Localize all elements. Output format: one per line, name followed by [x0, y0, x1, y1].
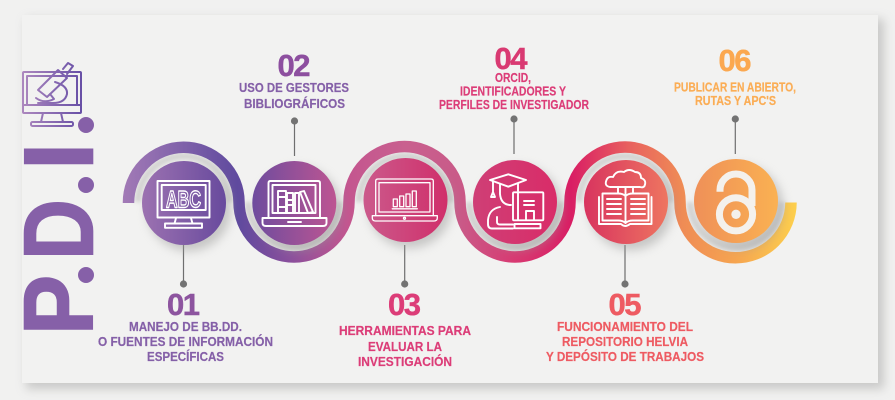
label 04: ORCID, — [495, 70, 531, 85]
label 03: EVALUAR LA — [368, 339, 442, 354]
label 06: RUTAS Y APC'S — [695, 93, 776, 108]
label 06: PUBLICAR EN ABIERTO, — [674, 80, 796, 94]
label 05: FUNCIONAMIENTO DEL — [557, 319, 693, 334]
step 6: open access circle — [694, 159, 783, 249]
label 04: IDENTIFICADORES Y — [460, 84, 566, 98]
label 03 — [339, 287, 471, 369]
icon: open book with cloud — [599, 170, 652, 226]
label 01: MANEJO DE BB.DD. — [129, 319, 242, 334]
icon: laptop with books — [262, 181, 326, 226]
label 05: REPOSITORIO HELVIA — [562, 334, 688, 349]
step 3: laptop with chart circle — [364, 158, 452, 248]
label 01: 01 — [167, 287, 200, 322]
icon: ABC monitor: ABC — [166, 186, 201, 214]
leader lines and dots — [180, 115, 739, 288]
label 06 — [674, 43, 796, 108]
label 04: PERFILES DE INVESTIGADOR — [439, 97, 589, 112]
label 01: ESPECÍFICAS — [147, 349, 224, 364]
step 1: ABC monitor circle — [142, 161, 231, 251]
ribbon: serpentine path — [128, 147, 791, 258]
label 04: 04 — [494, 41, 528, 76]
vertical title P.D.I.: P — [4, 275, 113, 335]
icon: open access padlock — [719, 174, 753, 231]
icon: monitor with microscope — [23, 63, 81, 126]
label 03: INVESTIGACIÓN — [358, 354, 452, 369]
label 01: O FUENTES DE INFORMACIÓN — [98, 334, 273, 349]
label 02 — [239, 48, 349, 111]
label 06: 06 — [718, 43, 752, 78]
step 4: graduate with monitor circle — [473, 160, 562, 250]
vertical title P.D.I.: D — [4, 199, 114, 260]
vertical title P.D.I.: I — [3, 143, 113, 170]
label 04 — [439, 41, 589, 112]
icon: laptop with bar chart — [372, 179, 437, 221]
label 02: BIBLIOGRÁFICOS — [244, 96, 345, 111]
label 02: USO DE GESTORES — [239, 80, 349, 95]
label 02: 02 — [278, 48, 310, 83]
label 03: HERRAMIENTAS PARA — [339, 323, 471, 338]
label 05: 05 — [608, 287, 642, 322]
label 05: Y DEPÓSITO DE TRABAJOS — [546, 349, 704, 364]
ribbon shadows — [138, 156, 782, 248]
icon: graduate with computer — [488, 174, 543, 228]
label 03: 03 — [388, 287, 421, 322]
step 5: book with cloud circle — [584, 160, 673, 250]
label 05 — [546, 287, 704, 364]
vertical title P.D.I. — [3, 117, 114, 335]
label 01 — [98, 287, 273, 364]
step 2: laptop with books circle — [252, 161, 341, 251]
